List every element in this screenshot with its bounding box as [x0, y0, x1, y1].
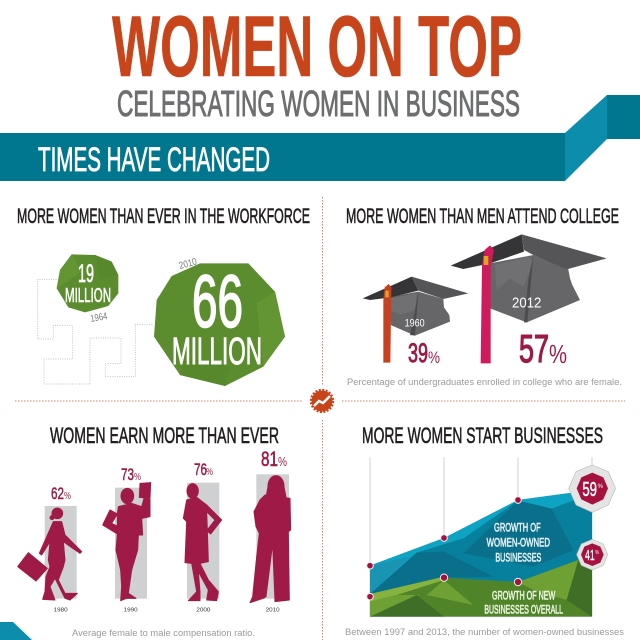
caption: earnings: Average female to male compensation ratio. [72, 628, 255, 639]
heading: workforce: MORE WOMEN THAN EVER IN THE WORKFORCE [17, 205, 310, 228]
icon: 2012 graduation cap: 2012 [512, 296, 541, 312]
figure: 2010: % [278, 454, 287, 469]
banner: times have changed [0, 95, 640, 181]
stat: 39%: 39 [408, 338, 428, 368]
figure: 2000: % [206, 467, 213, 478]
figure: 1990: 73 [121, 465, 134, 484]
icon: 1960 graduation cap: 1960 [405, 317, 425, 329]
figure: 1990: 1990 [124, 607, 138, 613]
2010 value: 66 million [154, 257, 285, 386]
icon: 1960 graduation cap [363, 277, 468, 363]
figure: 2010 [250, 448, 291, 613]
area chart: BUSINESSES OVERALL [484, 603, 563, 617]
figure: 1980: 62 [51, 484, 64, 503]
area chart: BUSINESSES [495, 551, 541, 565]
dotted connector path [38, 279, 153, 384]
stat: 39%: % [428, 348, 440, 367]
2010 value: 66 million: 2010 [178, 257, 199, 272]
figure: 1980: 1980 [54, 607, 68, 613]
heading: earnings: WOMEN EARN MORE THAN EVER [50, 423, 279, 448]
caption: businesses: Between 1997 and 2013, the number of women-owned businesses [345, 627, 624, 638]
figure: 1990 [103, 465, 151, 613]
stat: 57%: 57 [519, 328, 549, 371]
figure: 2000 [183, 460, 222, 613]
dotted dividers [15, 197, 625, 640]
2010 value: 66 million: MILLION [172, 331, 262, 373]
area chart: WOMEN-OWNED [487, 536, 550, 550]
icon: central gear badge [311, 390, 333, 412]
badge: 41%: % [595, 550, 599, 556]
icon: 2012 graduation cap [451, 234, 607, 363]
2010 value: 66 million: 66 [192, 260, 243, 343]
figure: 1990: % [134, 472, 141, 483]
stat: 57%: % [549, 339, 567, 369]
banner: times have changed: TIMES HAVE CHANGED [38, 141, 270, 179]
figure: 1980: % [64, 491, 71, 502]
1964 value: 19 million: 19 [78, 260, 94, 288]
1964 value: 19 million: 1964 [90, 311, 109, 325]
1964 value: 19 million: MILLION [65, 285, 111, 307]
caption: college: Percentage of undergraduates enrolled in college who are female. [347, 377, 622, 388]
area chart: GROWTH OF NEW [492, 588, 556, 602]
figure: 2000: 2000 [196, 607, 210, 613]
badge: 59%: % [598, 483, 603, 490]
panel: businesses [345, 423, 624, 638]
panel: college [346, 205, 622, 388]
area chart: GROWTH OF [494, 520, 541, 534]
badge: 41% [577, 539, 608, 570]
panel: earnings [18, 423, 291, 639]
area chart [367, 457, 592, 617]
figure: 2010: 2010 [266, 607, 280, 613]
figure: 2000: 76 [194, 460, 207, 479]
figure: 1980 [18, 484, 82, 613]
badge: 59% [569, 465, 616, 512]
badge: 41%: 41 [585, 548, 595, 564]
badge: 59%: 59 [582, 479, 597, 501]
corner ribbon [0, 622, 32, 640]
figure: 2010: 81 [261, 448, 278, 471]
1964 value: 19 million [57, 254, 118, 325]
panel: workforce [17, 205, 310, 386]
